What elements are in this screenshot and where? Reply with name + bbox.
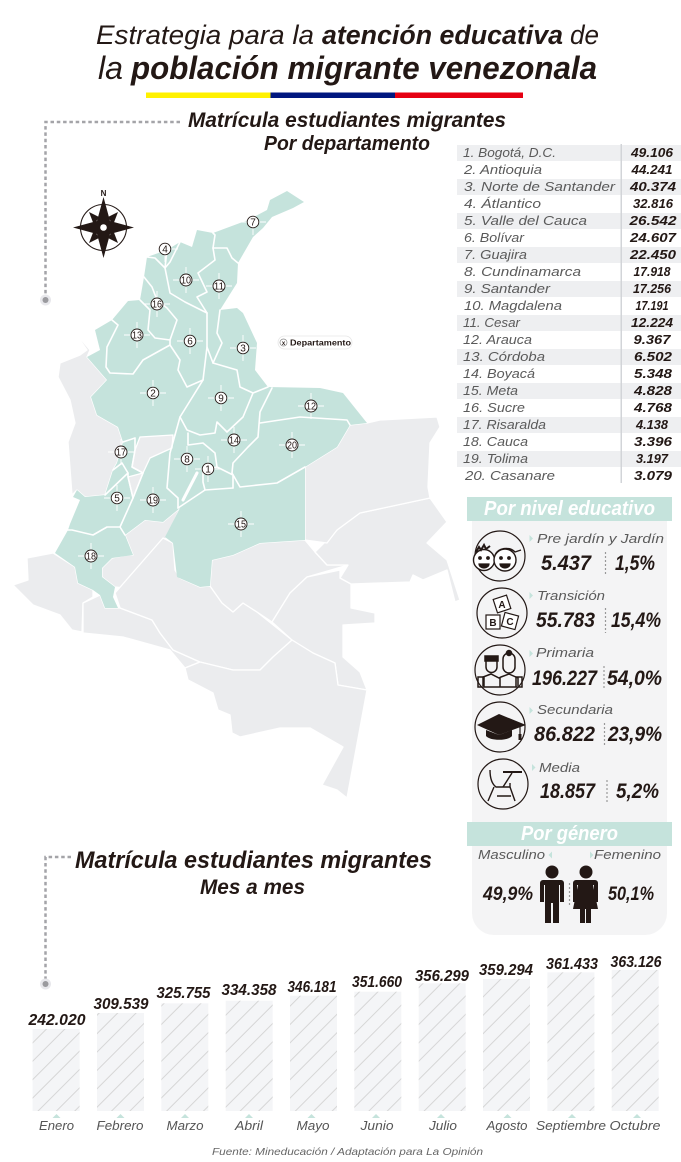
map: department markers: 13: [132, 330, 142, 342]
row: secundaria: 86.822: [534, 723, 595, 746]
icon: pupitre: [478, 759, 528, 809]
bar: octubre: 363.126: [610, 954, 662, 971]
table: matrícula por departamento: 19. Tolima: [463, 451, 528, 466]
table: matrícula por departamento: 4.768: [633, 400, 673, 415]
table: matrícula por departamento: 5. Valle del Cauca: [464, 213, 587, 228]
heading: por departamento: [188, 109, 506, 155]
table: matrícula por departamento: [457, 144, 681, 483]
bar: abril: 334.358: [222, 982, 277, 999]
bar: agosto: Agosto: [485, 1118, 528, 1133]
table: matrícula por departamento: 8. Cundinamarca: [464, 264, 581, 279]
bar: octubre: [610, 954, 662, 1133]
bar: febrero: 309.539: [94, 996, 149, 1013]
row: secundaria: [475, 702, 662, 752]
table: matrícula por departamento: 1. Bogotá, D.C.: [463, 145, 556, 160]
row: primaria: 54,0%: [607, 667, 662, 690]
map: department markers: [78, 209, 324, 569]
bar: abril: Abril: [234, 1118, 264, 1133]
heading band: por género: [467, 822, 672, 846]
map: department markers: 7: [250, 218, 256, 228]
icon: mujer: [573, 866, 598, 923]
icon: compass rose: N: [101, 189, 107, 198]
row: transición: [477, 588, 661, 638]
legend: departamento: [278, 336, 352, 349]
map: department markers: 17: [116, 448, 126, 458]
table: matrícula por departamento: 4.138: [635, 417, 669, 432]
icon: hombre: [540, 866, 564, 923]
table: matrícula por departamento: 2. Antioquia: [463, 162, 542, 177]
map: department markers: 9: [218, 394, 224, 404]
table: matrícula por departamento: 14. Boyacá: [463, 366, 535, 381]
row: media: 18.857: [540, 780, 596, 803]
row: transición: 55.783: [536, 609, 595, 632]
table: matrícula por departamento: 9. Santander: [464, 281, 551, 296]
map: department markers: 11: [214, 282, 225, 292]
bar: julio: Julio: [428, 1118, 457, 1133]
icon: estudiantes: [475, 645, 525, 695]
row: secundaria: Secundaria: [537, 702, 613, 717]
map of Colombia: [13, 191, 460, 798]
row: pre jardín y jardín: 1,5%: [615, 552, 655, 575]
heading: mes a mes: Matrícula estudiantes migrantes: [75, 847, 432, 874]
map: department markers: 14: [229, 436, 239, 446]
table: matrícula por departamento: 26.542: [628, 213, 677, 228]
bar: mayo: 346.181: [288, 979, 337, 996]
bar: enero: 242.020: [28, 1012, 86, 1029]
row: transición: 15,4%: [611, 609, 661, 632]
map: department markers: 1: [205, 464, 211, 476]
heading: mes a mes: [75, 847, 432, 899]
title: [96, 20, 599, 86]
table: matrícula por departamento: 17.918: [634, 264, 671, 279]
dotted leader: mes a mes: [40, 857, 71, 990]
map: department markers: 12: [306, 402, 316, 412]
map: gray enclaves: [128, 435, 173, 498]
table: matrícula por departamento: 12. Arauca: [463, 332, 532, 347]
bar: enero: Enero: [39, 1118, 74, 1133]
table: matrícula por departamento: 4. Átlantico: [464, 196, 541, 211]
icon: niños: [474, 531, 525, 581]
gender: femenino: 50,1%: [608, 884, 654, 905]
source note: Fuente: Mineducación / Adaptación para La Opinión: [212, 1146, 483, 1158]
bar: agosto: 359.294: [479, 962, 533, 979]
row: secundaria: 23,9%: [607, 723, 662, 746]
heading: por departamento: Matrícula estudiantes migrantes: [188, 109, 506, 132]
icon: bloques: [477, 588, 527, 638]
map: department markers: 15: [236, 520, 246, 530]
table: matrícula por departamento: 7. Guajira: [464, 247, 527, 262]
title: de: [570, 20, 599, 50]
bar: enero: [28, 1012, 86, 1133]
map: department markers: 20: [287, 440, 297, 452]
row: pre jardín y jardín: 5.437: [541, 552, 592, 575]
bar: febrero: [94, 996, 149, 1133]
map: department markers: 18: [86, 552, 96, 562]
table: matrícula por departamento: 13. Córdoba: [463, 349, 545, 364]
row: pre jardín y jardín: Pre jardín y Jardín: [537, 531, 664, 546]
panel: background nivel educativo y género: [472, 500, 667, 935]
table: matrícula por departamento: 17.191: [636, 298, 668, 313]
bar: marzo: [156, 985, 212, 1133]
table: matrícula por departamento: 3. Norte de Santander: [464, 179, 616, 194]
map: department markers: 3: [240, 344, 246, 354]
dotted leader: departamento: [40, 122, 180, 306]
table: matrícula por departamento: 32.816: [633, 196, 674, 211]
table: matrícula por departamento: 12.224: [631, 315, 674, 330]
table: matrícula por departamento: 5.348: [634, 366, 673, 381]
table: matrícula por departamento: 44.241: [630, 162, 672, 177]
map: department markers: 8: [184, 454, 190, 466]
title: población migrante venezonala: [130, 50, 597, 86]
legend: departamento: Departamento: [290, 338, 351, 348]
table: matrícula por departamento: 22.450: [629, 247, 677, 262]
gender: masculino: [478, 847, 564, 923]
row: transición: A: [498, 600, 506, 611]
heading: mes a mes: Mes a mes: [200, 876, 305, 899]
bar: junio: 351.660: [352, 974, 402, 991]
icon: birrete: [475, 702, 526, 752]
row: media: 5,2%: [616, 780, 659, 803]
bar chart: mes a mes: [28, 954, 662, 1133]
bar: agosto: [479, 962, 533, 1133]
gender: masculino: 49,9%: [482, 884, 533, 905]
table: matrícula por departamento: 6. Bolívar: [464, 230, 525, 245]
map: highlighted departments: [55, 191, 367, 608]
map: department markers: 19: [148, 496, 158, 506]
table: matrícula por departamento: 10. Magdalena: [464, 298, 562, 313]
table: matrícula por departamento: 24.607: [629, 230, 677, 245]
map: department markers: 6: [187, 336, 193, 348]
map: department markers: 4: [162, 244, 168, 256]
icon: compass rose: [73, 189, 134, 258]
bar: junio: Junio: [359, 1118, 394, 1133]
bar: febrero: Febrero: [96, 1118, 144, 1133]
bar: octubre: Octubre: [610, 1118, 660, 1133]
bar: marzo: Marzo: [166, 1118, 204, 1133]
table: matrícula por departamento: 20. Casanare: [464, 468, 555, 483]
table: matrícula por departamento: 6.502: [634, 349, 673, 364]
table: matrícula por departamento: 16. Sucre: [463, 400, 525, 415]
bar: julio: 356.299: [415, 968, 469, 985]
title: Estrategia para la: [96, 20, 314, 50]
row: primaria: 196.227: [532, 667, 598, 690]
table: matrícula por departamento: 3.396: [634, 434, 673, 449]
map: department markers: 10: [181, 276, 191, 286]
bar: septiembre: Septiembre: [536, 1118, 606, 1133]
row: pre jardín y jardín: [474, 531, 664, 581]
map: department markers: 5: [114, 494, 120, 504]
bar: julio: [415, 968, 469, 1133]
legend: departamento: x: [282, 341, 286, 347]
bar: marzo: 325.755: [156, 985, 212, 1002]
row: primaria: [475, 645, 662, 695]
divider: género: [568, 883, 570, 907]
table: matrícula por departamento: 17. Risaralda: [463, 417, 546, 432]
row: transición: Transición: [537, 588, 605, 603]
map: department markers: 2: [150, 388, 156, 400]
row: primaria: Primaria: [536, 645, 594, 660]
bar: mayo: Mayo: [296, 1118, 330, 1133]
bar: mayo: [288, 979, 337, 1133]
gender: femenino: [573, 847, 661, 923]
row: media: [478, 759, 659, 809]
gender: femenino: Femenino: [594, 847, 661, 862]
row: transición: C: [506, 617, 514, 628]
table: matrícula por departamento: 3.079: [634, 468, 673, 483]
title: la: [98, 50, 123, 86]
table: matrícula por departamento: 4.828: [633, 383, 673, 398]
bar: junio: [352, 974, 402, 1133]
heading band: por género: Por género: [521, 823, 618, 845]
table: matrícula por departamento: 49.106: [630, 145, 674, 160]
gender: masculino: Masculino: [478, 847, 545, 862]
map: department borders: [68, 233, 350, 535]
heading band: por nivel educativo: Por nivel educativo: [484, 498, 655, 520]
map: gray departments: [13, 330, 460, 798]
bar: abril: [222, 982, 277, 1133]
row: media: Media: [539, 760, 580, 775]
table: matrícula por departamento: 18. Cauca: [463, 434, 528, 449]
table: matrícula por departamento: 3.197: [636, 451, 669, 466]
table: matrícula por departamento: 17.256: [633, 281, 672, 296]
table: matrícula por departamento: 11. Cesar: [463, 315, 521, 330]
table: matrícula por departamento: 15. Meta: [463, 383, 518, 398]
bar: septiembre: [536, 956, 606, 1133]
table: matrícula por departamento: 9.367: [634, 332, 671, 347]
table: matrícula por departamento: 40.374: [629, 179, 677, 194]
map: department markers: 16: [152, 300, 162, 310]
title: atención educativa: [322, 20, 563, 50]
heading: por departamento: Por departamento: [264, 133, 430, 155]
bar: septiembre: 361.433: [546, 956, 598, 973]
flag stripe: [146, 92, 523, 98]
row: transición: B: [489, 618, 497, 629]
